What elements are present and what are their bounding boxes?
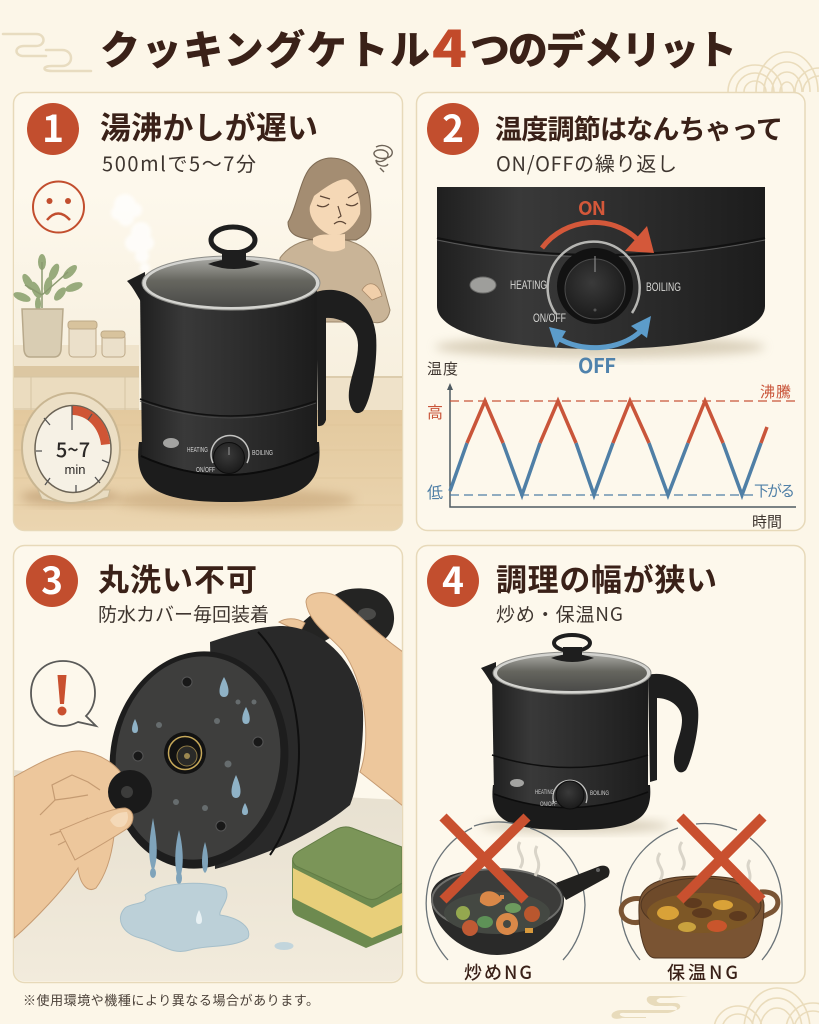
dial labels: HEATING (510, 278, 547, 292)
kettle control dial: ON/OFF (540, 802, 557, 808)
decoration: bottom-right wave pattern (714, 988, 819, 1024)
icon: warning speech bubble (31, 661, 96, 726)
heading 2: 温度調節はなんちゃって (495, 108, 783, 147)
plant in pot (12, 254, 84, 357)
number badge 3 (26, 551, 78, 607)
label keep warm NG: 保温NG (667, 959, 738, 985)
curry ingredients (657, 898, 747, 932)
red cross right (680, 817, 763, 900)
panel 1: slow boiling (12, 92, 403, 531)
number badge 4: 4 (442, 551, 464, 605)
heading 4: 調理の幅が狭い (496, 555, 717, 600)
label ON: ON (578, 194, 606, 221)
hand right (279, 593, 403, 806)
dial labels: BOILING (646, 280, 681, 294)
curry pot (621, 842, 778, 958)
steam (518, 842, 539, 876)
timer showing 5 to 7 min: min (65, 462, 85, 477)
kettle base (492, 785, 650, 830)
chart labels: 沸騰 (760, 381, 791, 402)
water drops on base (132, 677, 256, 815)
frying pan with stir-fry (431, 842, 610, 955)
panel 3: cannot wash whole (14, 546, 403, 982)
kettle glass lid (493, 652, 651, 694)
number badge 1: 1 (42, 99, 64, 153)
hand left with cap (14, 751, 152, 938)
kettle body (140, 290, 317, 474)
steam (658, 842, 750, 884)
kettle handle (316, 290, 376, 426)
decoration: top-right wave pattern (728, 52, 819, 92)
kettle spout (127, 272, 145, 308)
footnote: ※使用環境や機種により異なる場合があります。 (23, 990, 319, 1009)
kettle control dial: BOILING (252, 450, 273, 457)
kettle base (138, 442, 320, 502)
kettle handle ring (302, 588, 394, 641)
title end: つのデメリット (470, 18, 737, 76)
panel 4: limited cooking range (416, 546, 805, 985)
decoration: top-left clouds (3, 34, 91, 71)
number badge 2 (427, 99, 479, 155)
number badge 3: 3 (41, 551, 63, 605)
screws (133, 677, 263, 831)
title: クッキングケトル (100, 18, 430, 76)
kettle control dial (163, 436, 273, 474)
stir-fry ingredients (456, 891, 540, 936)
subheading 4: 炒め・保温NG (496, 600, 623, 627)
heading 3: 丸洗い不可 (98, 555, 257, 600)
red cross left (443, 817, 527, 900)
subheading 1: 500mlで5〜7分 (102, 148, 256, 177)
chart labels: 高 (427, 399, 443, 423)
woman looking frustrated (280, 158, 390, 323)
panel 2: temperature control (416, 92, 805, 532)
dial labels (510, 278, 681, 325)
indicator light (470, 277, 496, 293)
number badge 1 (27, 99, 79, 155)
kettle (480, 635, 698, 833)
kettle base close-up (435, 187, 765, 358)
icon: sad face (33, 182, 84, 232)
kettle lid knob (551, 635, 594, 662)
high and low threshold lines (450, 400, 795, 402)
kettle glass lid (142, 256, 320, 310)
arrow: OFF (549, 316, 651, 348)
title number 4: 4 (432, 10, 467, 82)
label OFF: OFF (578, 350, 616, 379)
water puddle (120, 883, 294, 951)
kettle body (210, 626, 363, 869)
title (100, 10, 737, 82)
subheading 2: ON/OFFの繰り返し (496, 148, 677, 177)
number badge 2: 2 (442, 99, 464, 153)
kettle control dial: HEATING (187, 447, 208, 454)
kettle lid knob (208, 227, 260, 269)
kettle handle (648, 674, 698, 782)
circle frames for dishes (426, 822, 782, 960)
chart labels: 時間 (752, 511, 782, 532)
timer showing 5 to 7 min (20, 393, 120, 505)
kettle large (127, 227, 376, 502)
temperature chart (427, 358, 796, 532)
label stir-fry NG: 炒めNG (464, 959, 532, 985)
zigzag blue section (450, 443, 761, 495)
dial (548, 242, 640, 324)
subheading 3: 防水カバー毎回装着 (98, 600, 269, 627)
jars (68, 321, 125, 357)
chart labels: 低 (427, 479, 443, 503)
number badge 4 (427, 551, 479, 607)
kettle control dial: BOILING (590, 791, 609, 797)
sponge (292, 827, 402, 948)
chart labels: 温度 (427, 358, 458, 379)
heading 1: 湯沸かしが遅い (100, 103, 318, 148)
kettle spout (481, 662, 496, 690)
kettle control dial: HEATING (535, 790, 554, 796)
chart labels (427, 358, 795, 532)
timer showing 5 to 7 min: 5~7 (56, 434, 90, 463)
scene: kitchen background (14, 190, 402, 531)
zigzag red section (467, 401, 767, 443)
counter surface (14, 770, 402, 981)
centre connector (164, 732, 206, 774)
dial labels: ON/OFF (533, 311, 566, 325)
icon: spiral frustration (374, 146, 392, 172)
steam (111, 194, 154, 273)
kettle control dial: ON/OFF (196, 467, 215, 474)
scene: wet kettle base (14, 588, 403, 981)
chart axes (450, 386, 796, 507)
kettle body (492, 676, 648, 808)
decoration: bottom clouds (612, 996, 688, 1019)
chart labels: 下がる (754, 480, 795, 501)
drips falling (149, 818, 208, 884)
arrow: ON (542, 222, 654, 253)
kettle control dial (510, 779, 609, 809)
kettle base plate (110, 651, 288, 869)
